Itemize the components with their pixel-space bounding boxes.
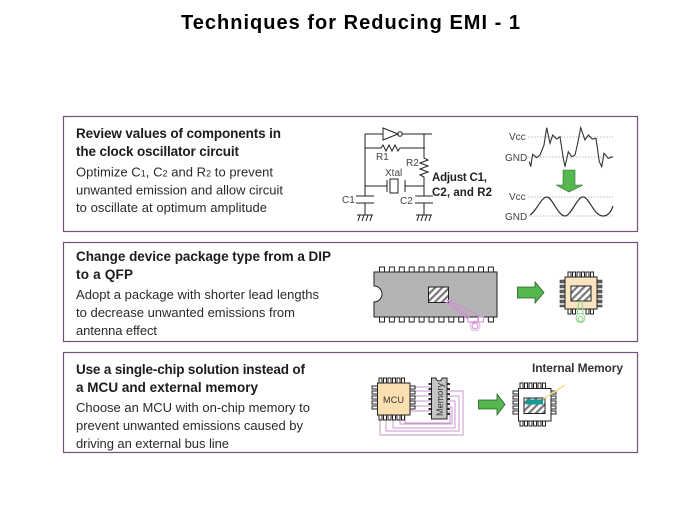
- icon: QFP package: [560, 272, 602, 322]
- text: oscillator description: unwanted emission and allow circuit: [76, 182, 283, 198]
- text: single-chip description: [76, 400, 310, 451]
- chart: noisy waveform: Vcc: [509, 132, 526, 143]
- heading: oscillator: Review values of components in: [76, 126, 281, 141]
- heading: single-chip: Use a single-chip solution instead of: [76, 362, 306, 377]
- heading: single-chip: a MCU and external memory: [76, 380, 258, 395]
- icon: MCU with external memory: Memory: [435, 382, 445, 416]
- text: package description: Adopt a package with shorter lead lengths: [76, 287, 320, 302]
- text: oscillator description: Optimize C1, C2 and R2 to prevent: [76, 164, 273, 180]
- panel: single-chip: [64, 352, 638, 452]
- icon: MCU with external memory: [372, 378, 463, 435]
- chart: oscillator circuit diagram: C2, and R2: [432, 187, 492, 199]
- icon: DIP package: [374, 267, 497, 331]
- text: oscillator description: [76, 164, 283, 215]
- chart: oscillator circuit diagram: R2: [406, 158, 419, 169]
- arrow: right memory: [478, 394, 505, 415]
- title: Techniques for Reducing EMI - 1: [181, 12, 520, 34]
- text: package description: to decrease unwanted emissions from: [76, 305, 295, 320]
- text: oscillator description: to oscillate at optimum amplitude: [76, 200, 267, 215]
- chart: oscillator circuit diagram: C1: [342, 195, 355, 206]
- chart: clean waveform: GND: [505, 212, 527, 223]
- text: single-chip description: driving an external bus line: [76, 436, 229, 451]
- arrow: right package: [518, 282, 544, 303]
- icon: MCU with external memory: MCU: [383, 395, 404, 405]
- chart: clean waveform: Vcc: [509, 192, 526, 203]
- text: single-chip description: Choose an MCU with on-chip memory to: [76, 400, 310, 415]
- heading: package: [76, 249, 331, 282]
- chart: oscillator circuit diagram: C2: [400, 196, 413, 207]
- text: package description: [76, 287, 320, 338]
- chart: oscillator circuit diagram: R1: [376, 152, 389, 163]
- panel: clock oscillator: [64, 116, 638, 232]
- chart: noisy waveform: [505, 128, 613, 167]
- heading: single-chip: [76, 362, 306, 395]
- chart: oscillator circuit diagram: Adjust C1,: [432, 172, 487, 184]
- text: package description: antenna effect: [76, 323, 157, 338]
- chart: noisy waveform: GND: [505, 153, 527, 164]
- chart: oscillator circuit diagram: [342, 128, 492, 221]
- heading: oscillator: [76, 126, 281, 159]
- label: internal memory: Internal Memory: [532, 361, 623, 375]
- panel: package type: [64, 242, 638, 342]
- heading: package: Change device package type from a DIP: [76, 249, 331, 264]
- text: single-chip description: prevent unwanted emissions caused by: [76, 418, 304, 433]
- chart: oscillator circuit diagram: Xtal: [385, 168, 402, 179]
- arrow: down: [556, 170, 583, 192]
- heading: package: to a QFP: [76, 267, 133, 282]
- heading: oscillator: the clock oscillator circuit: [76, 144, 240, 159]
- icon: MCU with internal memory: [513, 383, 565, 426]
- chart: clean waveform: [505, 192, 613, 223]
